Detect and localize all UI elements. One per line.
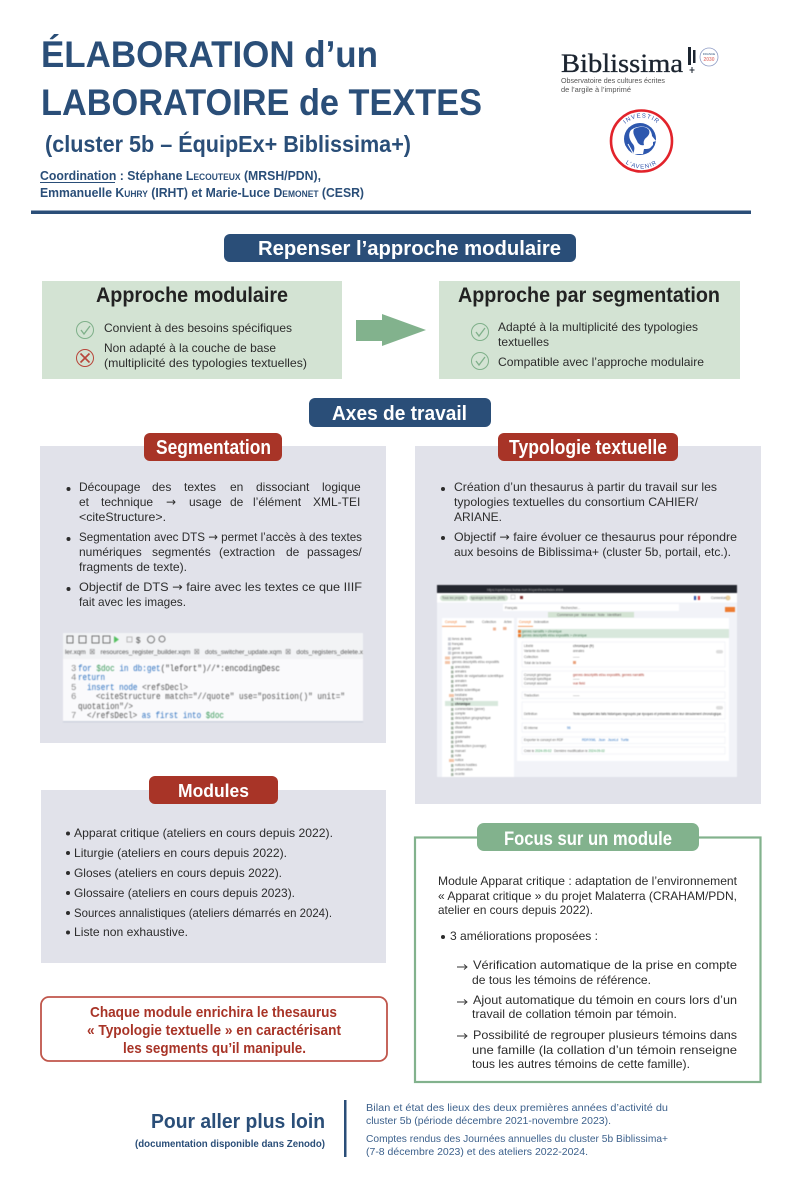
concept panel: annales: [573, 649, 585, 653]
panel: approche modulaire: Convient à des besoins spécifiques: [104, 321, 292, 335]
text block: segmentation bullets: usage: [189, 495, 222, 509]
panel: segmentation: [40, 433, 386, 743]
tree panel: Arbre: [504, 620, 512, 624]
tree panel: genré: [452, 646, 460, 650]
concept panel: RDF/XML Json JsonLd Turtle: [582, 738, 629, 742]
concept panel: ——: [573, 694, 580, 698]
screenshot: code editor: ler.xqm ☒ resources_register_builder.xqm ☒ dots_switcher_update.xqm ☒ dots_registers_delete.x: [65, 648, 364, 656]
tree panel: livres de tests: [452, 637, 472, 641]
logo: Biblissima: [561, 47, 718, 94]
text block: segmentation bullets: de: [286, 545, 300, 559]
text block: segmentation bullets: segmentés: [152, 545, 211, 559]
text block: segmentation bullets: <citeStructure>.: [79, 510, 166, 524]
concept panel: Exporter le concept en RDF: [524, 738, 563, 742]
list: improvements: Possibilité de regrouper plusieurs témoins dans: [473, 1028, 737, 1042]
concept panel: Traduction: [524, 694, 539, 698]
text block: typologie bullets: Objectif → faire évoluer ce thesaurus pour répondre: [454, 530, 737, 544]
footer heading: pour aller plus loin: Pour aller plus loin: [151, 1111, 325, 1133]
logo: Investir l'avenir: L’AVENIR: [626, 160, 656, 169]
concept panel: Total de la branche: [524, 661, 551, 665]
footer heading: pour aller plus loin: (documentation disponible dans Zenodo): [135, 1139, 325, 1150]
list: improvements: de tous les témoins de référence.: [472, 973, 651, 987]
list: modules: Gloses (ateliers en cours depuis 2022).: [74, 866, 282, 880]
concept panel: Texte rapportant des faits historiques regroupés par époques et présentés selon leur déroulement chronologique.: [573, 712, 722, 716]
screenshot: code editor: $: [136, 636, 141, 645]
tree panel: notices hostiles: [455, 763, 477, 767]
callout: thesaurus enrichment: « Typologie textuelle » en caractérisant: [87, 1022, 341, 1039]
callout: thesaurus enrichment: Chaque module enrichira le thesaurus: [90, 1004, 337, 1021]
panel: approche par segmentation: Compatible avec l’approche modulaire: [498, 355, 704, 369]
footer links: (7-8 décembre 2023) et des ateliers 2022-2024.: [366, 1146, 588, 1158]
list: improvements: Vérification automatique de la prise en compte: [473, 958, 737, 972]
panel: approche par segmentation: [439, 281, 740, 379]
concept panel: Créé le 2024-09-02 Dernière modification le 2024-09-02: [524, 749, 605, 753]
concept panel: Variante du libellé: [524, 649, 549, 653]
concept panel: ——: [573, 655, 580, 659]
text block: segmentation bullets: Découpage: [79, 480, 141, 494]
concept panel: Indexation: [534, 620, 549, 624]
concept panel: chronique (fr): [573, 644, 594, 648]
title: LABORATOIRE de TEXTES: [41, 82, 482, 123]
footer links: cluster 5b (période décembre 2021-novembre 2023).: [366, 1115, 611, 1127]
screenshot: thesaurus application: https://opentheso.huma-num.fr/opentheso/index.xhtml: [487, 588, 563, 592]
coordination credits: Emmanuelle Kuhry (IRHT) et Marie-Luce Demonet (CESR): [40, 185, 364, 200]
heading: focus sur un module: [477, 823, 699, 851]
concept panel: ——: [573, 677, 580, 681]
concept panel: Concept: [519, 620, 531, 624]
concept panel: Concept spécifique: [524, 677, 551, 681]
tree panel: commentaire (genre): [455, 707, 485, 711]
tree panel: genres argumentatifs: [452, 656, 482, 660]
screenshot: code editor: 5: [71, 683, 76, 693]
footer links: Bilan et état des lieux des deux premières années d’activité du: [366, 1102, 668, 1114]
text block: module intro: [438, 874, 738, 943]
text block: typologie bullets: ARIANE.: [454, 510, 502, 524]
heading: modules: Modules: [178, 781, 249, 801]
screenshot: code editor: 3: [71, 664, 76, 674]
text block: typologie bullets: aux besoins de Biblissima+ (cluster 5b, portail, etc.).: [454, 545, 731, 559]
subtitle: (cluster 5b – ÉquipEx+ Biblissima+): [45, 130, 411, 157]
heading: segmentation: Segmentation: [156, 437, 271, 459]
screenshot: code editor: insert node <refsDecl>: [87, 683, 188, 693]
tree panel: chronique: [455, 702, 471, 706]
tree panel: bestiaire: [455, 693, 467, 697]
heading: focus sur un module: Focus sur un module: [504, 829, 672, 850]
text block: typologie bullets: typologies textuelles du consortium CAHIER/: [454, 495, 699, 509]
concept panel: [517, 618, 729, 761]
tree panel: notice: [455, 758, 464, 762]
callout: thesaurus enrichment: [41, 997, 387, 1061]
text block: segmentation bullets: des: [152, 480, 171, 494]
heading: modules: [149, 776, 278, 804]
icon: check: [472, 352, 488, 370]
list: improvements: travail de collation témoin par témoin.: [472, 1007, 677, 1021]
logo: Biblissima: de l’argile à l’imprimé: [561, 85, 631, 94]
screenshot: thesaurus application: typologie textuelle (805): [471, 596, 505, 600]
tree panel: genre de texte: [452, 651, 473, 655]
concept panel: Libellé: [524, 644, 533, 648]
list: improvements: [457, 958, 737, 1071]
text block: segmentation bullets: passages/: [307, 545, 362, 559]
concept panel: genres narratifs > chronique: [522, 630, 562, 634]
panel: approche par segmentation: textuelles: [498, 335, 549, 349]
concept panel: Définition: [524, 712, 538, 716]
screenshot: code editor: </refsDecl> as first into $doc: [87, 711, 224, 721]
text block: module intro: atelier en cours depuis 2022).: [438, 903, 593, 917]
arrow: modulaire to segmentation: [356, 314, 426, 346]
text block: segmentation bullets: l’élément: [253, 495, 302, 509]
list: improvements: Ajout automatique du témoin en cours lors d’un: [473, 993, 737, 1007]
list: modules: Sources annalistiques (ateliers démarrés en 2024).: [74, 906, 332, 920]
screenshot: code editor: 6: [71, 692, 76, 702]
banner: Repenser l'approche modulaire: [224, 234, 576, 262]
text block: segmentation bullets: Segmentation avec DTS → permet l’accès à des textes: [79, 530, 362, 544]
tree panel: article de vulgarisation scientifique: [455, 674, 504, 678]
icon: cross: [76, 350, 94, 366]
tree panel: description géographique: [455, 716, 491, 720]
screenshot: thesaurus application: Français: [505, 606, 518, 610]
screenshot: code editor: return: [78, 673, 105, 683]
panel: approche modulaire: (multiplicité des typologies textuelles): [104, 356, 307, 370]
text block: segmentation bullets: [66, 480, 362, 609]
title: [41, 34, 482, 123]
heading: segmentation: [144, 433, 282, 461]
text block: segmentation bullets: logique: [322, 480, 361, 494]
tree panel: annuaire: [455, 684, 468, 688]
header rule: [31, 210, 751, 214]
panel: typologie textuelle: [415, 433, 761, 804]
tree panel: recette: [455, 772, 465, 776]
tree panel: discours: [455, 721, 467, 725]
list: improvements: tous les autres témoins de cette famille).: [472, 1057, 690, 1071]
logo: Biblissima: Biblissima: [561, 49, 683, 78]
tree panel: guide: [455, 740, 463, 744]
coordination credits: [40, 168, 364, 200]
logo: Biblissima: Observatoire des cultures écrites: [561, 76, 665, 85]
text block: segmentation bullets: en: [230, 480, 243, 494]
text block: module intro: Module Apparat critique : adaptation de l’environnement: [438, 874, 738, 888]
footer links: [366, 1102, 668, 1158]
text block: module intro: « Apparat critique » du projet Malaterra (CRAHAM/PDN,: [438, 889, 737, 903]
list: modules: Glossaire (ateliers en cours depuis 2023).: [74, 886, 295, 900]
concept panel: 96: [567, 726, 571, 730]
concept panel: genres descriptifs et/ou expositifs, genres narratifs: [573, 673, 644, 677]
panel: approche par segmentation: Approche par segmentation: [458, 284, 720, 307]
text block: typologie bullets: Création d’un thesaurus à partir du travail sur les: [454, 480, 717, 494]
panel: approche modulaire: Approche modulaire: [96, 284, 288, 307]
tree panel: annalen: [455, 679, 467, 683]
icon: check: [472, 324, 488, 340]
tree panel: anecdotes: [455, 665, 470, 669]
tree panel: introduction (ouvrage): [455, 744, 486, 748]
tree panel: bibliographie: [455, 697, 473, 701]
list: modules: [66, 826, 333, 939]
panel: focus sur un module: [415, 823, 760, 1082]
tree panel: Concept: [445, 620, 457, 624]
text block: segmentation bullets: et: [79, 495, 90, 509]
tree panel: compte: [455, 712, 466, 716]
tree panel: manuel: [455, 749, 466, 753]
logo: Biblissima: 2030: [703, 57, 715, 63]
panel: modules: [41, 776, 386, 963]
text block: segmentation bullets: technique: [101, 495, 153, 509]
tree panel: français: [452, 642, 464, 646]
list: modules: Apparat critique (ateliers en cours depuis 2022).: [74, 826, 333, 840]
heading: typologie textuelle: Typologie textuelle: [509, 437, 667, 459]
callout: thesaurus enrichment: les segments qu’il manipule.: [123, 1040, 306, 1057]
concept panel: genres descriptifs et/ou expositifs > chronique: [522, 634, 587, 638]
screenshot: code editor: for $doc in db:get("lefort")//*:encodingDesc: [78, 664, 280, 674]
text block: segmentation bullets: fait avec les images.: [79, 595, 186, 609]
screenshot: code editor: [63, 633, 364, 722]
tree panel: genres descriptifs et/ou expositifs: [452, 660, 500, 664]
screenshot: thesaurus application: Commence par Mot exact Note Identifiant: [557, 613, 621, 617]
text block: segmentation bullets: (extraction: [219, 545, 275, 559]
banner: Axes de travail: [309, 398, 491, 427]
arrow: [457, 964, 467, 970]
tree panel: annales: [455, 670, 467, 674]
tree panel: Collection: [482, 620, 496, 624]
arrow: [457, 1000, 467, 1004]
banner: Repenser l'approche modulaire: Repenser l’approche modulaire: [258, 238, 561, 260]
tree panel: essai: [455, 730, 463, 734]
tree panel: note: [455, 754, 461, 758]
logo: Biblissima: FRANCE: [703, 52, 715, 56]
footer divider: [344, 1100, 346, 1157]
tree panel: dissertation: [455, 726, 472, 730]
concept panel: Concept générique: [524, 673, 551, 677]
text block: segmentation bullets: de: [230, 495, 244, 509]
screenshot: thesaurus application: Tous les projets: [442, 596, 465, 600]
tree panel: grammaire: [455, 735, 470, 739]
logo: Investir l'avenir: [610, 109, 674, 173]
text block: segmentation bullets: fragments de texte).: [79, 560, 187, 574]
text block: segmentation bullets: numériques: [79, 545, 142, 559]
panel: approche par segmentation: Adapté à la multiplicité des typologies: [498, 320, 698, 334]
tree panel: Index: [466, 620, 474, 624]
screenshot: code editor: <citeStructure match="//quote" use="position()" unit=": [96, 692, 345, 702]
coordination credits: Coordination : Stéphane Lecouteux (MRSH/PDN),: [40, 168, 321, 183]
concept panel: Collection: [524, 655, 538, 659]
tree panel: [442, 618, 514, 777]
text block: module intro: 3 améliorations proposées :: [450, 929, 598, 943]
arrow: [457, 1034, 467, 1038]
footer heading: pour aller plus loin: [135, 1111, 325, 1150]
screenshot: code editor: 4: [71, 673, 76, 683]
panel: approche modulaire: Non adapté à la couche de base: [104, 341, 276, 355]
screenshot: code editor: 7: [71, 711, 76, 721]
text block: segmentation bullets: →: [166, 495, 176, 509]
text block: segmentation bullets: textes: [184, 480, 216, 494]
screenshot: thesaurus application: Connexion: [711, 596, 726, 600]
screenshot: thesaurus application: [437, 585, 737, 777]
title: ÉLABORATION d’un: [41, 34, 378, 75]
screenshot: thesaurus application: Rechercher...: [561, 606, 580, 610]
text block: segmentation bullets: Objectif de DTS → faire avec les textes ce que IIIF: [79, 580, 362, 594]
concept panel: vue field: [573, 682, 585, 686]
icon: check: [76, 322, 94, 338]
concept panel: Concept associé: [524, 682, 548, 686]
tree panel: préservation: [455, 768, 473, 772]
banner: Axes de travail: Axes de travail: [332, 403, 467, 425]
panel: approche modulaire: [42, 281, 342, 379]
logo: Investir l'avenir: INVESTIR: [623, 113, 659, 124]
text block: segmentation bullets: dissociant: [256, 480, 310, 494]
text block: typologie bullets: [441, 480, 737, 559]
screenshot: code editor: quotation"/>: [78, 702, 133, 712]
tree panel: article scientifique: [455, 688, 481, 692]
concept panel: ID interne: [524, 726, 538, 730]
footer links: Comptes rendus des Journées annuelles du cluster 5b Biblissima+: [366, 1133, 668, 1145]
list: modules: Liste non exhaustive.: [74, 925, 188, 939]
list: modules: Liturgie (ateliers en cours depuis 2022).: [74, 846, 287, 860]
list: improvements: une famille (la collation d’un témoin renseigne: [472, 1043, 737, 1057]
text block: segmentation bullets: XML-TEI: [313, 495, 360, 509]
